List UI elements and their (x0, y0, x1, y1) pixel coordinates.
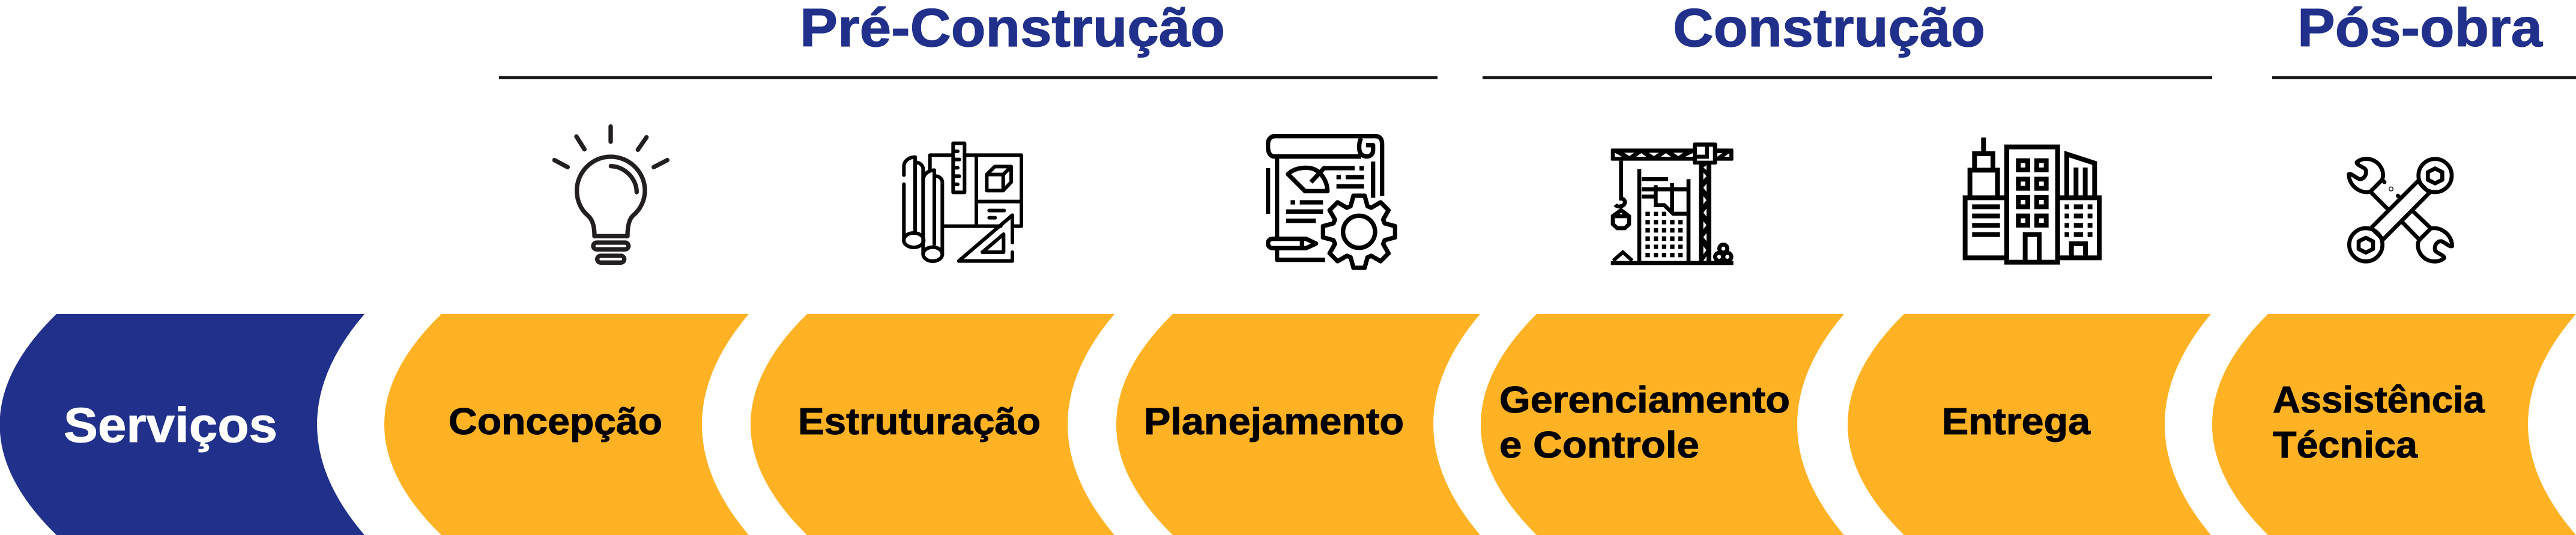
panel: Gerenciamento e Controle (1481, 314, 1844, 535)
panel: Serviços (0, 314, 364, 535)
heading: Pré-Construção (499, 0, 1438, 79)
panel: Estruturação (751, 314, 1114, 535)
chevron: orange (384, 314, 749, 535)
chevron: orange (1116, 314, 1480, 535)
chevron: orange (751, 314, 1114, 535)
panel: Concepção (384, 314, 749, 535)
chevron: navy (0, 314, 364, 535)
label: Planejamento: Planejamento (1144, 401, 1404, 443)
icon: blueprints, ruler and set square (904, 144, 1021, 261)
label: Entrega: Entrega (1942, 401, 2091, 443)
heading: Pós-obra (2272, 0, 2576, 79)
chevron: orange (1481, 314, 1844, 535)
label: e Controle: e Controle (1499, 425, 1699, 466)
icon: crossed wrenches (2349, 159, 2452, 261)
chevron: orange (2212, 314, 2576, 535)
icon: city buildings (1965, 138, 2099, 262)
label: Gerenciamento: Gerenciamento (1499, 379, 1790, 421)
label: Técnica: Técnica (2273, 425, 2418, 466)
heading: Construção (1483, 0, 2212, 79)
label: Serviços: Serviços (64, 398, 277, 453)
panel: Entrega (1848, 314, 2211, 535)
panel: Planejamento (1116, 314, 1480, 535)
panel: Assistência Técnica (2212, 314, 2576, 535)
icon: light bulb (554, 127, 667, 262)
icon: tower crane and building (1611, 142, 1734, 263)
label: Estruturação: Estruturação (798, 401, 1041, 443)
label: Assistência: Assistência (2273, 379, 2485, 421)
chevron: orange (1848, 314, 2211, 535)
label: Concepção: Concepção (449, 401, 662, 443)
icon: plan scroll with gear (1268, 136, 1395, 268)
